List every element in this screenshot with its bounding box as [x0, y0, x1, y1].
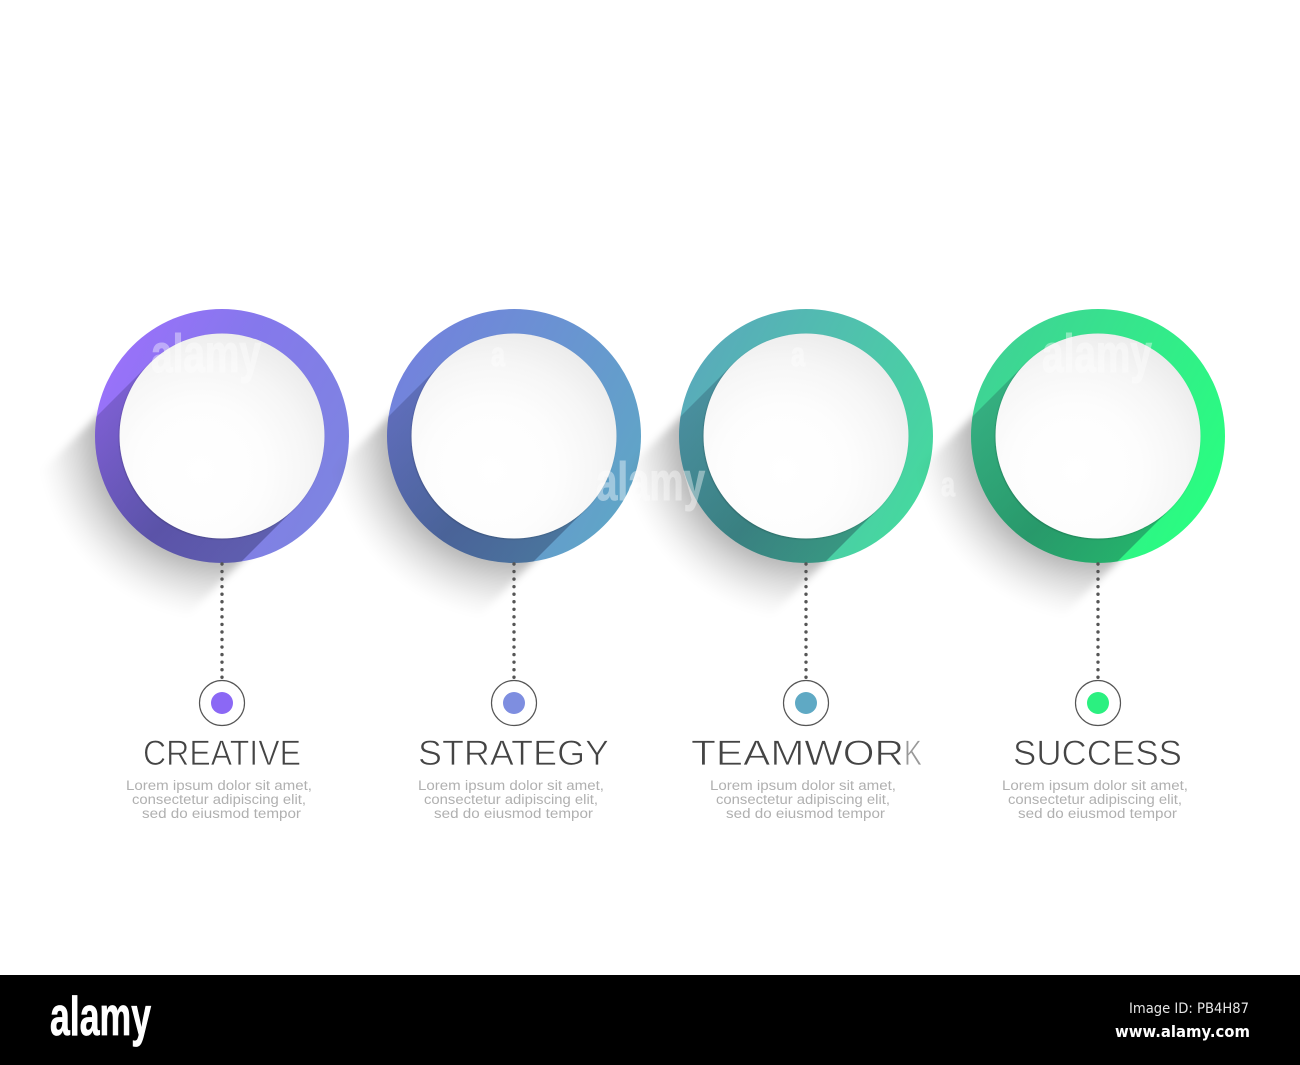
footer bar [0, 975, 1300, 1065]
white disc: teamwork [704, 334, 908, 538]
description: creative: consectetur adipiscing elit, [132, 792, 306, 807]
heading: teamwork: K [904, 734, 922, 773]
dotted connector: teamwork [804, 564, 808, 678]
cast shadow on ring: creative [95, 364, 294, 563]
ring: creative [95, 309, 349, 563]
marker: strategy [492, 680, 536, 726]
watermarks: alamy [596, 452, 705, 512]
watermarks: a [941, 466, 956, 504]
heading: creative: CREATIVE [143, 734, 301, 773]
description: teamwork: consectetur adipiscing elit, [716, 792, 890, 807]
watermarks: alamy [1042, 324, 1152, 384]
description: teamwork: sed do eiusmod tempor [726, 806, 886, 821]
description: teamwork: Lorem ipsum dolor sit amet, [710, 778, 896, 793]
description: success: Lorem ipsum dolor sit amet, [1002, 778, 1188, 793]
ring: success [971, 309, 1225, 563]
description: strategy [418, 778, 604, 821]
marker: success [1076, 680, 1120, 726]
long shadow: success [876, 364, 1170, 658]
white disc: strategy [412, 334, 616, 538]
panel: teamwork [638, 309, 933, 821]
ring: strategy [387, 309, 641, 563]
watermarks: a [491, 336, 506, 374]
description: teamwork [710, 778, 896, 821]
description: strategy: consectetur adipiscing elit, [424, 792, 598, 807]
description: creative: sed do eiusmod tempor [142, 806, 302, 821]
long shadow: teamwork [584, 364, 878, 658]
heading: success: SUCCESS [1013, 734, 1182, 773]
description: strategy: Lorem ipsum dolor sit amet, [418, 778, 604, 793]
ring: teamwork [679, 309, 933, 563]
image id: Image ID: PB4H87 [1129, 1001, 1249, 1017]
website: www.alamy.com [1115, 1022, 1250, 1041]
white disc: creative [120, 334, 324, 538]
description: success [1002, 778, 1188, 821]
description: creative [126, 778, 312, 821]
description: creative: Lorem ipsum dolor sit amet, [126, 778, 312, 793]
panel: success [930, 309, 1225, 821]
description: success: sed do eiusmod tempor [1018, 806, 1178, 821]
panel: strategy [346, 309, 641, 821]
cast shadow on ring: strategy [387, 364, 586, 563]
dotted connector: strategy [512, 564, 516, 678]
white disc: success [996, 334, 1200, 538]
cast shadow on ring: success [971, 364, 1170, 563]
watermarks [151, 324, 1152, 512]
long shadow: strategy [292, 364, 586, 658]
watermarks: a [791, 336, 806, 374]
description: strategy: sed do eiusmod tempor [434, 806, 594, 821]
panel: creative [54, 309, 349, 821]
marker: teamwork [784, 680, 828, 726]
marker: creative [200, 680, 244, 726]
heading: teamwork: TEAMWOR [691, 734, 904, 773]
footer logo: alamy [50, 985, 151, 1047]
dotted connector: creative [220, 564, 224, 678]
long shadow: creative [0, 364, 294, 658]
dotted connector: success [1096, 564, 1100, 678]
cast shadow on ring: teamwork [679, 364, 878, 563]
heading: strategy: STRATEGY [418, 734, 609, 773]
description: success: consectetur adipiscing elit, [1008, 792, 1182, 807]
watermarks: alamy [151, 324, 261, 384]
